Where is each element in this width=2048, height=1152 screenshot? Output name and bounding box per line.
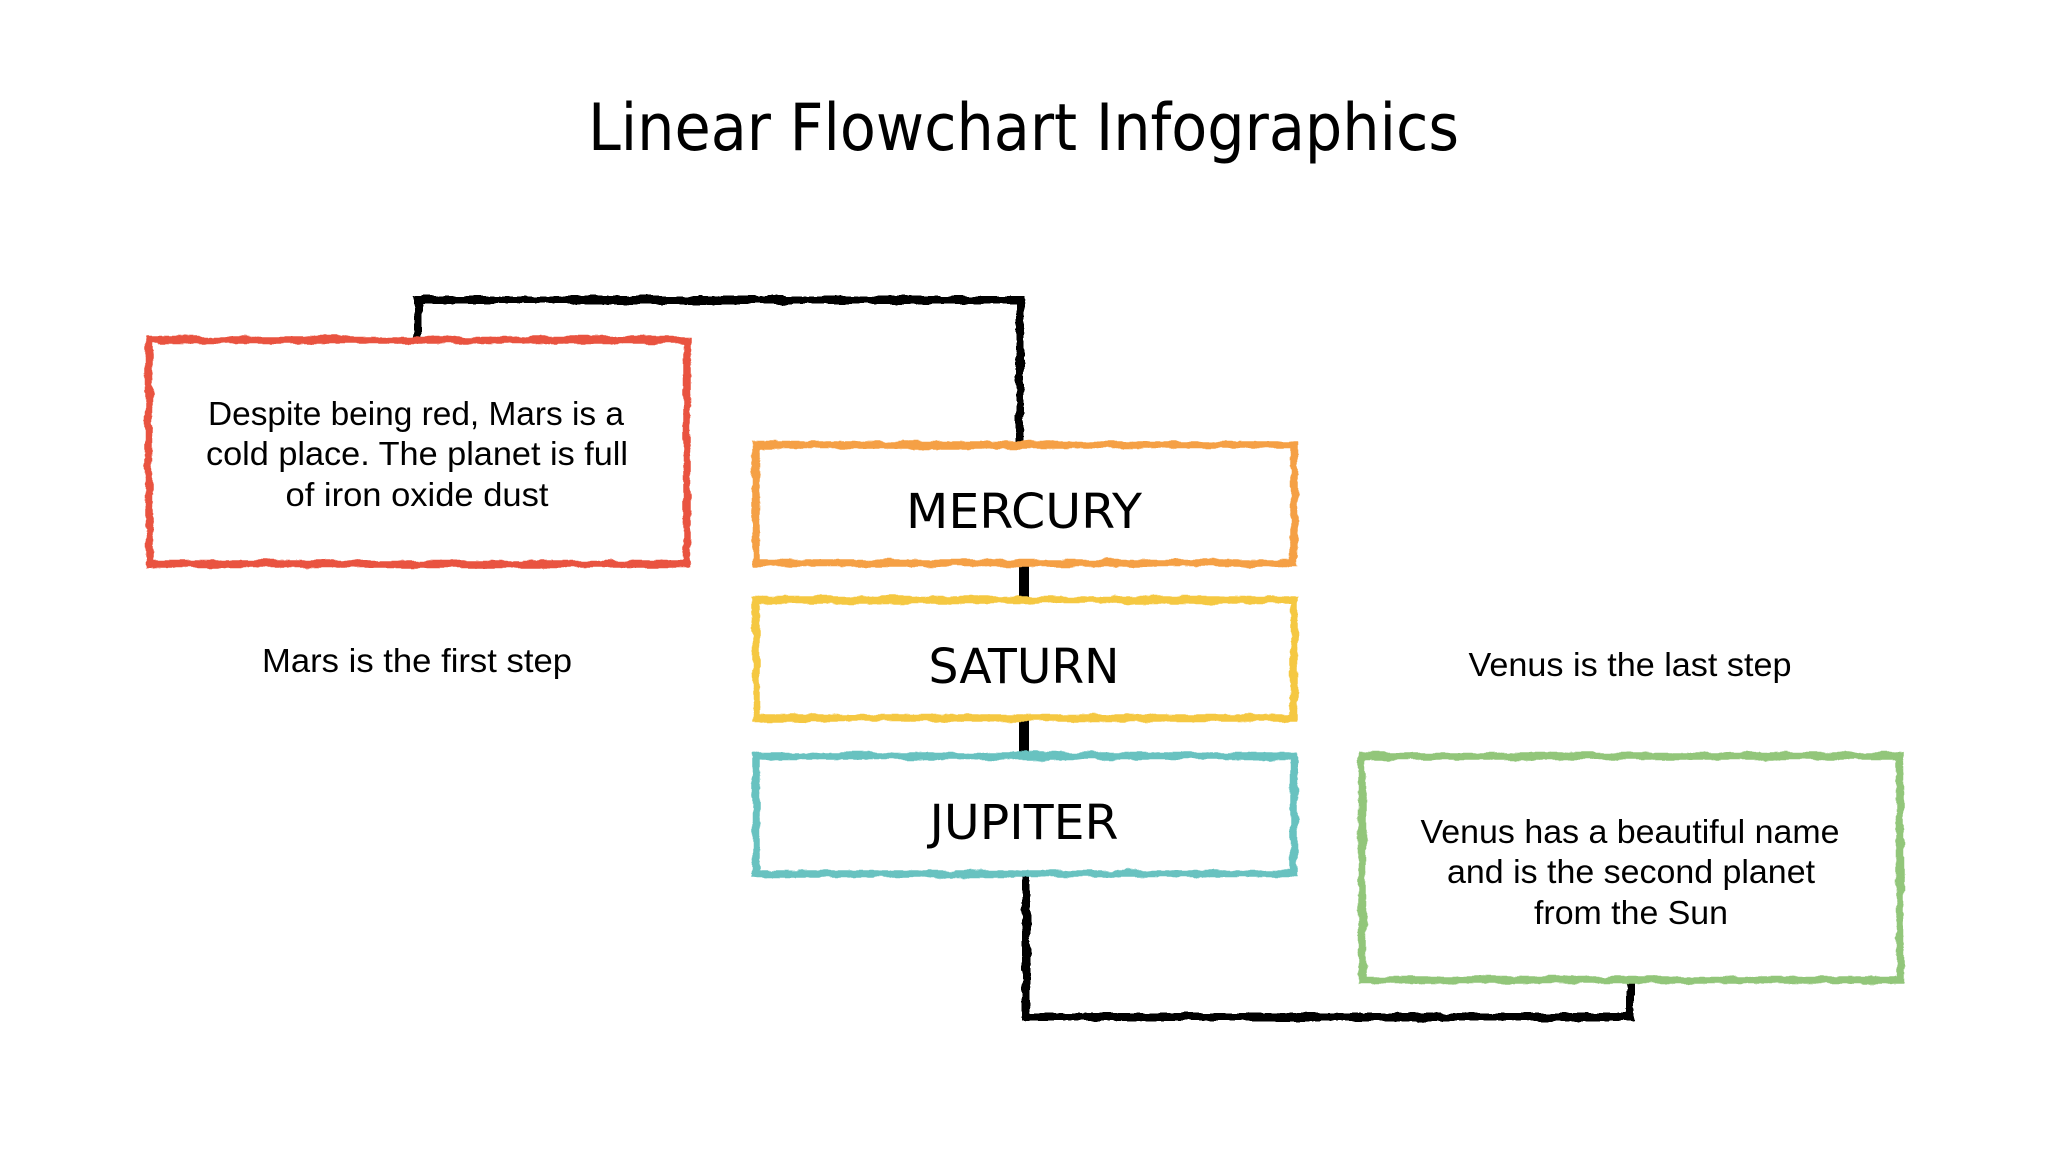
panel: Mars description: Despite being red, Mars is a xyxy=(208,396,624,433)
panel: Saturn: SATURN xyxy=(928,639,1120,695)
panel: Venus description: from the Sun xyxy=(1534,895,1728,932)
panel: Jupiter: JUPITER xyxy=(926,795,1118,851)
panel: Venus description xyxy=(1362,756,1900,980)
connector: Saturn to Jupiter xyxy=(1019,720,1029,754)
panel: Mercury: MERCURY xyxy=(906,484,1143,540)
title: Linear Flowchart Infographics xyxy=(588,91,1459,166)
panel: Mars description: cold place. The planet is full xyxy=(206,436,628,473)
panel: Mars description: of iron oxide dust xyxy=(286,477,549,514)
panel: Mercury xyxy=(756,445,1294,563)
panel: Mars description xyxy=(149,340,687,564)
panel: Saturn xyxy=(756,600,1294,718)
panel: Venus description: Venus has a beautiful name xyxy=(1420,814,1840,851)
connector: Mars to Mercury xyxy=(418,300,1020,445)
caption: Mars first step: Mars is the first step xyxy=(262,643,572,680)
connector: Jupiter to Venus xyxy=(1026,875,1630,1017)
panel: Venus description: and is the second planet xyxy=(1447,854,1816,891)
caption: Venus last step: Venus is the last step xyxy=(1468,647,1792,684)
connector: Mercury to Saturn xyxy=(1019,565,1029,599)
panel: Jupiter xyxy=(756,756,1294,874)
